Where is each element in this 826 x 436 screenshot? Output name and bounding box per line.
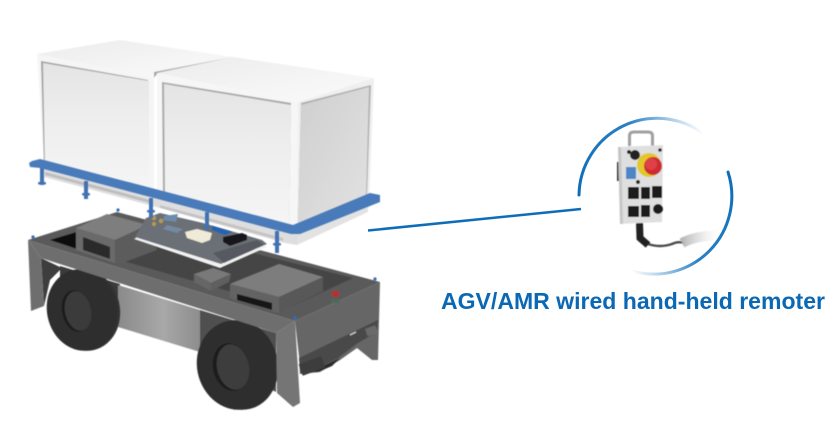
circle arc lower [632,172,732,274]
caption: AGV/AMR wired hand-held remoter [441,288,825,314]
red switch [331,291,340,303]
front deck box [230,264,323,313]
button grid [628,186,663,217]
remote cable [640,223,718,246]
emergency stop [637,153,661,177]
rear box [37,40,233,195]
icon: rear wheel [39,263,128,357]
selector switch [630,150,640,160]
blue corner bolts [31,208,377,320]
side connector [617,162,623,181]
remote handle [630,132,652,146]
front box side [297,78,374,230]
right end panel [295,282,380,374]
base under boxes [44,160,368,245]
rear deck box [76,214,157,263]
rear box top [37,40,233,78]
rear box front [37,54,154,195]
rail bar [29,159,380,234]
rail legs [38,168,281,253]
chassis top deck [28,212,380,321]
vehicle chassis [28,208,380,417]
connector line [368,209,581,230]
label sticker [626,167,636,179]
vehicle belly [118,285,200,352]
cargo boxes [37,40,374,245]
controller board [134,213,267,268]
blue pallet rail [29,159,380,253]
small deck box [194,268,231,291]
brass antenna connectors [152,216,163,226]
remote body [618,145,663,224]
front box top [157,57,374,102]
front box [157,57,374,230]
circle arc upper [579,118,704,195]
rear left leg interior [41,258,62,306]
icon: hand-held remote [617,132,718,246]
icon: front wheel [189,313,287,417]
front beam and legs [28,240,295,333]
white connector [185,229,212,243]
front box front [157,73,298,230]
black connector [223,233,247,246]
